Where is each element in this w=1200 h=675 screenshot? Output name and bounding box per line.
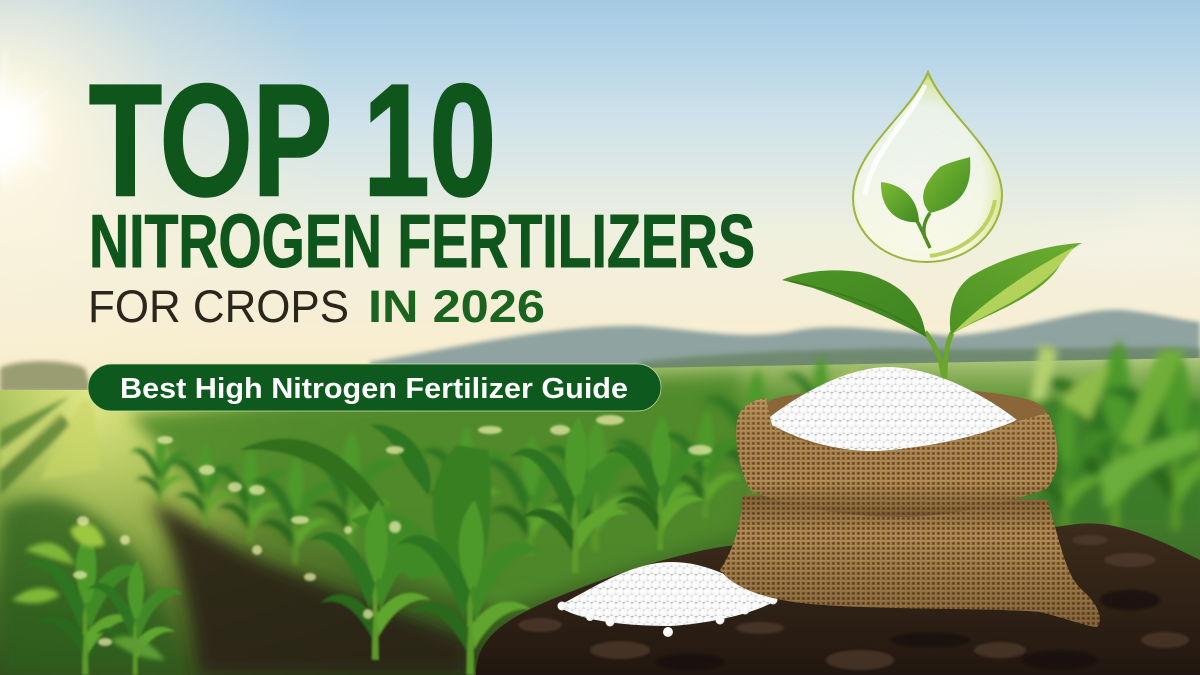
title line 3: FOR CROPS [88, 281, 349, 332]
background: crop field [0, 358, 1200, 675]
right background corn, blurred [700, 340, 1200, 531]
dark lower left plants [0, 498, 190, 675]
granule pile on soil [558, 562, 778, 637]
background: sun glow [0, 0, 600, 400]
water droplet with leaves [853, 72, 1002, 262]
burlap sack with granules [720, 367, 1100, 627]
seedling [782, 243, 1082, 385]
right leaf [950, 243, 1082, 335]
stem [925, 332, 952, 385]
left crop rows [0, 396, 100, 495]
title: IN 2026 [368, 281, 545, 332]
granules in sack [765, 367, 1017, 451]
mid green corn mass [130, 375, 740, 610]
left leaf [782, 270, 926, 337]
central soil furrow [150, 500, 470, 675]
subtitle pill: Best High Nitrogen Fertilizer Guide [120, 373, 628, 405]
background: clouds [1040, 205, 1200, 268]
sack inner rim [745, 388, 1050, 470]
background: distant hills [0, 310, 1200, 392]
sack folded collar [736, 398, 1058, 517]
title line 2: NITROGEN FERTILIZERS [89, 199, 755, 283]
foreground corn [25, 417, 714, 675]
mid-row corn, blurred [130, 411, 750, 564]
background: sky [0, 0, 1200, 400]
left sunlit leaves [12, 523, 165, 660]
subtitle pill [88, 364, 661, 411]
sack body [720, 495, 1100, 627]
droplet sprout [881, 157, 970, 248]
soil mound [476, 523, 1200, 675]
title line 1: TOP 10 [89, 51, 496, 229]
title [88, 51, 755, 332]
sunlit highlights on leaves [73, 415, 712, 646]
